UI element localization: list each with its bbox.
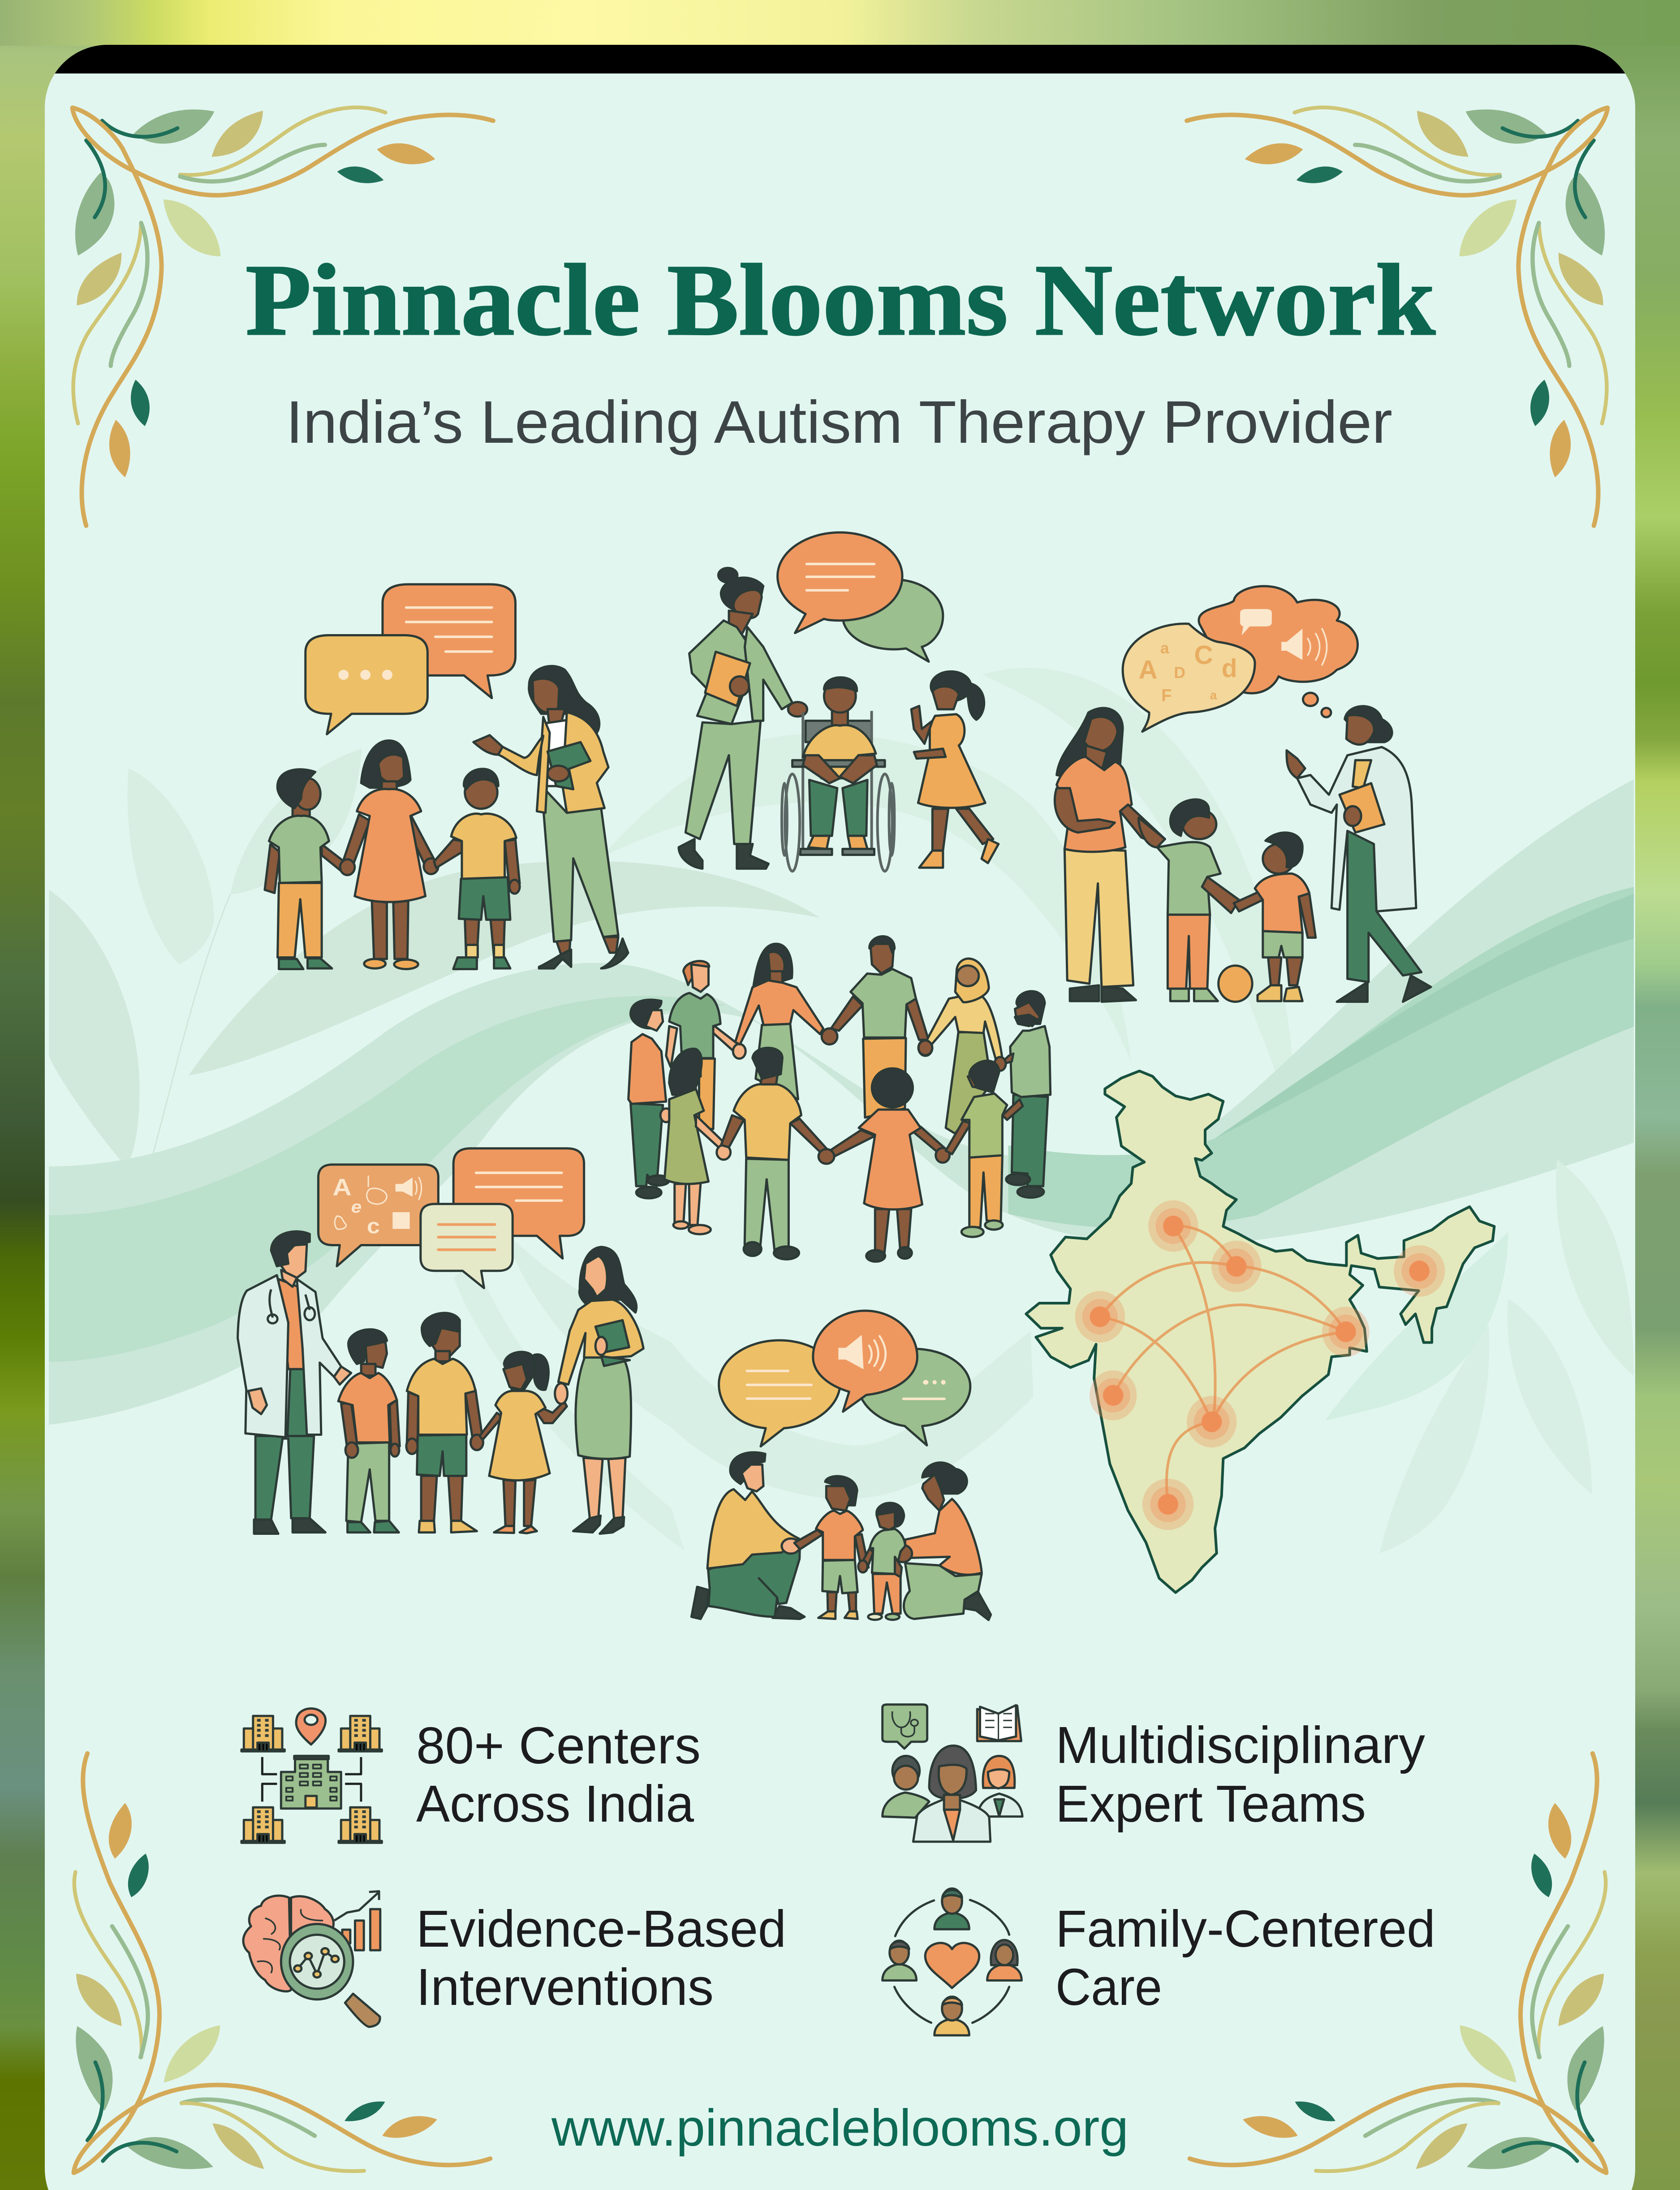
feature: evidence-based interventions xyxy=(243,1891,786,2027)
text: 80+ Centers Across India: 80+ Centers xyxy=(416,1716,701,1775)
feature: family-centered care xyxy=(883,1888,1435,2035)
text: Multidisciplinary Expert Teams: Expert Teams xyxy=(1055,1775,1366,1833)
subtitle: India’s Leading Autism Therapy Provider xyxy=(286,389,1392,456)
scene: teacher with children and speech bubbles xyxy=(265,584,628,969)
man in green shirt xyxy=(822,936,932,1118)
cream bubble with letters: F xyxy=(1161,686,1172,705)
boy in yellow shirt xyxy=(434,769,520,969)
India outline xyxy=(1026,1071,1494,1593)
cream bubble with letters: A xyxy=(1139,655,1158,685)
man in green with amber trousers, back xyxy=(666,961,745,1129)
text: Evidence-Based Interventions: Evidence-Based xyxy=(416,1900,786,1958)
small boy in orange shirt xyxy=(1234,833,1316,1001)
child in green and amber xyxy=(946,1061,1023,1237)
doctor xyxy=(238,1231,351,1533)
icon: family ring around a heart xyxy=(883,1888,1021,2035)
boy in orange shirt xyxy=(338,1330,400,1533)
therapist in green blazer xyxy=(679,568,807,868)
boy in wheelchair xyxy=(782,678,894,871)
speech bubble with symbols: A xyxy=(332,1174,352,1201)
girl in olive dress xyxy=(664,1049,731,1234)
teacher in yellow blazer xyxy=(474,666,628,968)
center location markers xyxy=(1075,1200,1445,1530)
connection network lines xyxy=(1100,1226,1346,1504)
scene: wheelchair, language therapy xyxy=(679,532,1431,1002)
kneeling man xyxy=(691,1452,805,1619)
feature: 80+ centers xyxy=(241,1708,701,1843)
speech bubble with symbols: e xyxy=(351,1198,362,1217)
child in orange shirt xyxy=(794,1476,869,1619)
website url: www.pinnacleblooms.org xyxy=(551,2099,1129,2157)
text: Family-Centered Care: Care xyxy=(1055,1958,1162,2016)
speech bubble: orange with speaker xyxy=(813,1311,917,1412)
title: Pinnacle Blooms Network xyxy=(246,244,1435,357)
speech bubble: orange xyxy=(383,584,515,698)
floral corner: top right xyxy=(1187,108,1607,526)
cream bubble with letters: a xyxy=(1210,688,1217,702)
mother in orange top xyxy=(1055,708,1165,1002)
icon: brain, magnifier and chart xyxy=(243,1891,380,2027)
kneeling woman xyxy=(894,1463,991,1620)
girl in amber dress xyxy=(911,671,999,868)
scene: doctor, mother and children xyxy=(238,1149,643,1533)
background swooshes and leaves xyxy=(49,668,1634,1553)
speech bubble with symbols: c xyxy=(367,1214,380,1238)
feature: multidisciplinary teams xyxy=(883,1705,1425,1842)
floral corner: bottom left xyxy=(74,1754,490,2173)
girl in orange dress from behind xyxy=(818,1068,950,1261)
floral corner: top left xyxy=(73,108,493,526)
speech bubble: orange round xyxy=(778,532,902,633)
scene: parents kneeling with children xyxy=(691,1311,991,1620)
text: 80+ Centers Across India: Across India xyxy=(416,1775,694,1833)
text: Family-Centered Care: Family-Centered xyxy=(1055,1900,1435,1958)
map of India with connected centers xyxy=(1026,1071,1494,1593)
boy in green shirt with ball xyxy=(1139,799,1252,1002)
thought cloud with sound icon xyxy=(1199,586,1357,717)
scene: community circle holding hands xyxy=(629,936,1051,1261)
cream bubble with letters: D xyxy=(1174,664,1185,682)
speech bubble: orange xyxy=(453,1149,584,1258)
small child in green xyxy=(858,1503,905,1620)
speech bubble with symbols xyxy=(318,1165,438,1266)
bearded man xyxy=(995,991,1051,1197)
speech bubble: cream xyxy=(421,1204,513,1288)
woman with orange top and green skirt xyxy=(735,944,823,1099)
speech bubble: green xyxy=(843,579,943,661)
icon: network of center buildings xyxy=(241,1708,382,1843)
boy in yellow shirt xyxy=(406,1313,483,1533)
boy in orange xyxy=(629,1000,672,1198)
girl in yellow dress xyxy=(480,1352,567,1533)
woman in yellow top xyxy=(555,1247,643,1533)
text: Evidence-Based Interventions: Interventions xyxy=(416,1958,714,2016)
icon: doctors team with book and stethoscope xyxy=(883,1705,1022,1842)
top black bar xyxy=(45,45,1635,73)
cream bubble with letters: C xyxy=(1194,640,1213,670)
cream bubble with letters xyxy=(1123,624,1255,732)
cream bubble with letters: d xyxy=(1222,654,1237,683)
floral corner: bottom right xyxy=(1190,1754,1606,2173)
girl in orange dress xyxy=(340,740,438,969)
man in yellow from behind xyxy=(721,1048,830,1259)
woman in hijab xyxy=(918,959,1002,1134)
speech bubble: green xyxy=(858,1349,970,1445)
text: Multidisciplinary Expert Teams: Multidisciplinary xyxy=(1055,1716,1425,1774)
child in green shirt xyxy=(265,769,350,969)
cream bubble with letters: a xyxy=(1160,639,1169,657)
speech bubble: yellow xyxy=(719,1340,840,1447)
doctor in white coat xyxy=(1287,706,1431,1002)
speech bubble: yellow xyxy=(306,635,427,734)
